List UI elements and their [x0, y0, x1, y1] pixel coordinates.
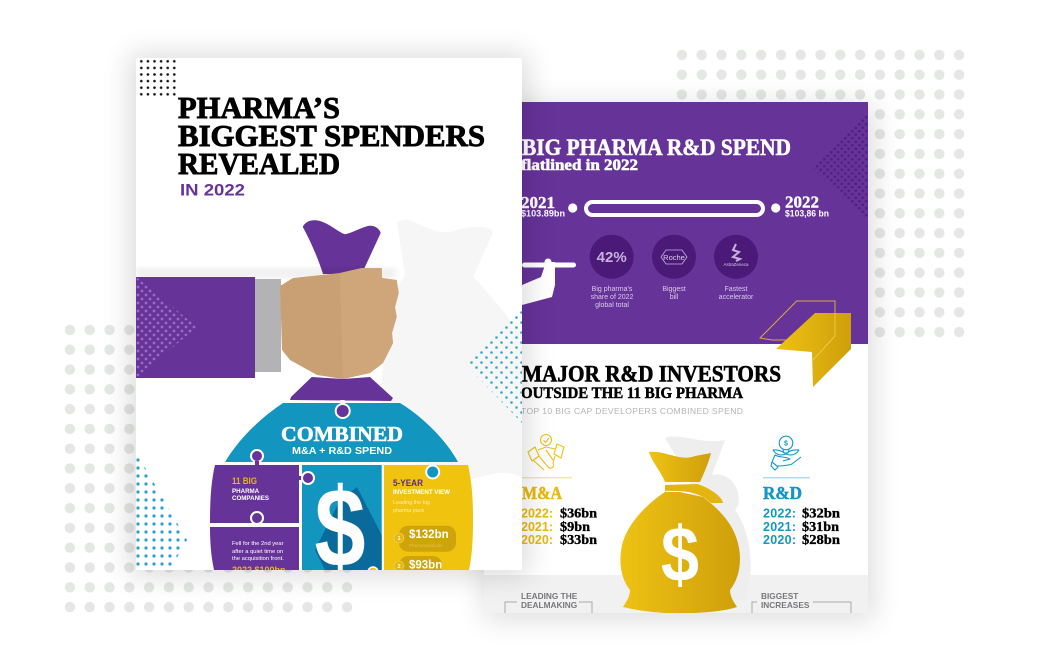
2022 row: [763, 506, 841, 520]
value pill 1: 1: [397, 536, 401, 542]
2021 row: [521, 519, 591, 534]
dollar sign: $: [661, 510, 699, 598]
sublabel: INVESTMENT VIEW: [393, 489, 450, 496]
value pill 2: $93bn: [409, 560, 442, 572]
dot grid: bottom left: [60, 320, 357, 617]
stat: Roche biggest bill: [652, 235, 696, 301]
icon: gold chevron: [760, 301, 851, 387]
puzzle piece: dollar: [299, 465, 382, 570]
heading: big pharma R&D spend: [522, 139, 790, 170]
sublabel: PHARMA: [232, 488, 260, 495]
dollar shadow: [315, 487, 382, 570]
2021 row: $9bn: [560, 519, 591, 534]
end dot: [771, 203, 780, 213]
cuff: [255, 279, 281, 372]
dot diamond: teal right: [464, 305, 522, 423]
puzzle piece: 11 big pharma: [210, 450, 299, 524]
stat caption: global total: [595, 302, 629, 309]
panel: right page: [484, 102, 868, 613]
puzzle bag: [210, 400, 473, 570]
icon: hand holding bar: [522, 258, 576, 305]
stat caption: Fastest: [725, 286, 748, 293]
connector: [299, 476, 302, 480]
ghost bag shadow: [665, 436, 751, 600]
title line two: BIGGEST SPENDERS: [178, 118, 485, 153]
value pill 1: Pharmaceuticals: [409, 543, 443, 548]
shadow under arm: [137, 268, 395, 278]
title R&D: R&D: [763, 483, 802, 503]
ghost bag: [380, 220, 522, 480]
puzzle piece: acquisition note: [210, 527, 299, 570]
clipped value: 2022 $100bn: [232, 565, 286, 575]
2020 row: $28bn: [802, 532, 841, 547]
bag neck: [290, 377, 393, 401]
connector top: [251, 450, 263, 462]
start dot: [568, 203, 577, 213]
2022 row: [521, 506, 598, 520]
heading line one: BIG PHARMA R&D SPEND: [522, 135, 791, 160]
callout: biggest increases: BIGGEST: [761, 591, 798, 601]
2022 row: 2022:: [763, 506, 796, 520]
puzzle piece: combined: [225, 400, 458, 462]
2021 row: 2021:: [521, 520, 553, 534]
dot grid: top right: [672, 45, 969, 342]
sublabel: COMPANIES: [232, 495, 269, 502]
stat: Roche biggest bill: Roche: [663, 253, 685, 262]
stat caption: bill: [670, 294, 679, 301]
year 2022: 2022: [785, 192, 819, 212]
rule: [522, 477, 572, 478]
value pill 1: [394, 526, 456, 552]
stat: 42 percent: [590, 235, 634, 309]
subtitle: IN 2022: [180, 180, 245, 200]
block: R&D: $: [784, 440, 788, 448]
2022 row: $36bn: [560, 506, 598, 520]
panel: R&D spend header: [522, 102, 868, 344]
label: 5-YEAR: [393, 478, 423, 489]
icon: fist: [280, 268, 399, 379]
dot triangle: sleeve: [136, 277, 197, 378]
note text: the acquisition front.: [232, 556, 284, 562]
puzzle piece: 5-year view: [384, 465, 473, 578]
title line one: PHARMA’S: [178, 90, 340, 125]
2021 row: $31bn: [802, 519, 840, 534]
page background: [136, 58, 522, 570]
2021 row: 2021:: [763, 520, 796, 534]
icon: gold money bag: [620, 452, 740, 613]
connector bottom: [368, 567, 378, 577]
stat: AstraZeneca fastest accelerator: [714, 235, 758, 301]
timeline: 2021 to 2022: [521, 192, 829, 218]
callout: biggest increases: INCREASES: [761, 600, 810, 610]
callout: leading the dealmaking: DEALMAKING: [521, 600, 577, 610]
value pill 2: 2: [397, 564, 401, 570]
title line three: REVEALED: [178, 146, 340, 181]
2022 row: 2022:: [521, 506, 553, 520]
callout: leading the dealmaking: LEADING THE: [521, 591, 578, 601]
connector: [426, 466, 439, 478]
2020 row: $33bn: [560, 532, 598, 547]
dollar sign: $: [314, 464, 366, 590]
value pill 2: [394, 556, 442, 578]
icon: plant and hand: [771, 436, 801, 470]
block: R&D: [763, 436, 841, 547]
page background: [484, 102, 868, 613]
value pill 1: $132bn: [409, 529, 449, 541]
shadow: right page: [484, 104, 874, 620]
stat caption: accelerator: [719, 294, 754, 301]
2020 row: 2020:: [521, 533, 553, 547]
value 2021: $103.89bn: [521, 208, 565, 218]
label: 11 BIG: [232, 476, 257, 487]
subheading: TOP 10 BIG CAP DEVELOPERS COMBINED SPEND: [521, 406, 743, 416]
block: M&A: [521, 434, 598, 547]
heading: major R&D investors: [522, 366, 780, 414]
subheading: M&A + R&D SPEND: [292, 445, 392, 457]
connector bottom: [251, 512, 263, 524]
value 2022: $103,86 bn: [785, 208, 829, 218]
note text: after a quiet time on: [232, 549, 283, 555]
icon: handshake: [528, 434, 564, 470]
stat caption: Big pharma's: [592, 286, 633, 293]
bag top: purple: [303, 220, 381, 274]
stat caption: share of 2022: [591, 294, 634, 301]
2021 row: [763, 519, 840, 534]
rule: [763, 477, 810, 478]
sleeve: [136, 277, 255, 378]
heading line two: OUTSIDE THE 11 BIG PHARMA: [521, 385, 743, 402]
2020 row: 2020:: [763, 533, 796, 547]
stat: 42 percent: 42%: [597, 249, 627, 266]
note: Leading the big: [393, 500, 430, 506]
note text: Fell for the 2nd year: [232, 541, 284, 547]
stat: AstraZeneca fastest accelerator: AstraZeneca: [724, 262, 749, 267]
note: pharma pack: [393, 508, 424, 514]
2022 row: $32bn: [802, 506, 841, 520]
connector: [340, 400, 344, 404]
heading: combined: COMBINED: [281, 422, 403, 446]
dot grid: black corner: [140, 60, 176, 96]
title: [178, 98, 484, 175]
2020 row: [763, 532, 841, 547]
panel: left page: [136, 58, 522, 590]
title M&A: M&A: [522, 483, 562, 503]
callout: leading the dealmaking: [505, 591, 592, 613]
dot triangle: dark purple: [812, 112, 868, 222]
year 2021: 2021: [521, 193, 555, 212]
dot triangle: teal left: [136, 452, 187, 570]
flat bar: [586, 202, 763, 215]
heading line one: MAJOR R&D INVESTORS: [522, 362, 781, 386]
shadow: left page: [130, 54, 528, 576]
stat caption: Biggest: [662, 286, 686, 293]
heading line two: flatlined in 2022: [521, 157, 638, 174]
callout: biggest increases: [752, 591, 851, 613]
panel: bottom band: [484, 575, 868, 613]
2020 row: [521, 532, 598, 547]
